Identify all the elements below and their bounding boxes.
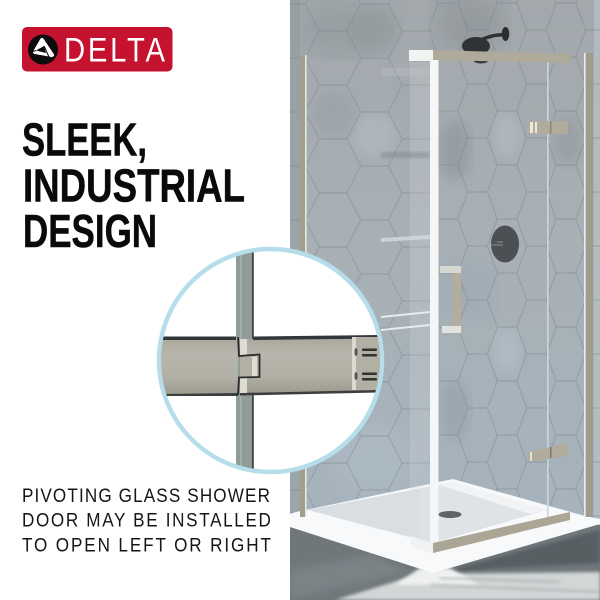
thin glass edge <box>547 62 549 517</box>
shower tray <box>290 479 600 573</box>
title: INDUSTRIAL <box>23 160 245 212</box>
photo: shower enclosure <box>290 0 600 600</box>
icon: Delta triangle mark <box>28 34 58 64</box>
title <box>22 114 245 257</box>
right wall channel <box>584 53 593 517</box>
valve trim <box>491 226 519 262</box>
top rail <box>409 50 570 63</box>
title: DESIGN <box>23 205 157 257</box>
lower hinge <box>528 443 568 462</box>
left wall channel <box>300 55 307 517</box>
glass reflections <box>380 62 430 488</box>
bottom threshold <box>410 512 570 553</box>
logo: Delta <box>22 27 172 72</box>
glass panel edge <box>236 250 254 472</box>
logo wordmark: DELTA <box>64 30 166 69</box>
hinge knuckle <box>238 337 260 395</box>
collar and slots <box>352 337 380 390</box>
description text: DOOR MAY BE INSTALLED <box>22 510 271 531</box>
callout: hinge close-up <box>159 249 382 472</box>
upper hinge <box>528 121 568 134</box>
description text: PIVOTING GLASS SHOWER <box>22 485 270 506</box>
door handle <box>440 266 461 334</box>
floor <box>290 525 600 600</box>
white door post <box>430 60 438 544</box>
title: SLEEK, <box>22 114 147 166</box>
right hinge leaf <box>240 335 380 396</box>
description text <box>22 485 271 556</box>
drain <box>438 511 462 518</box>
left hinge leaf <box>160 336 238 396</box>
description text: TO OPEN LEFT OR RIGHT <box>22 535 271 556</box>
tiled wall <box>290 0 600 540</box>
shower head <box>462 27 509 64</box>
